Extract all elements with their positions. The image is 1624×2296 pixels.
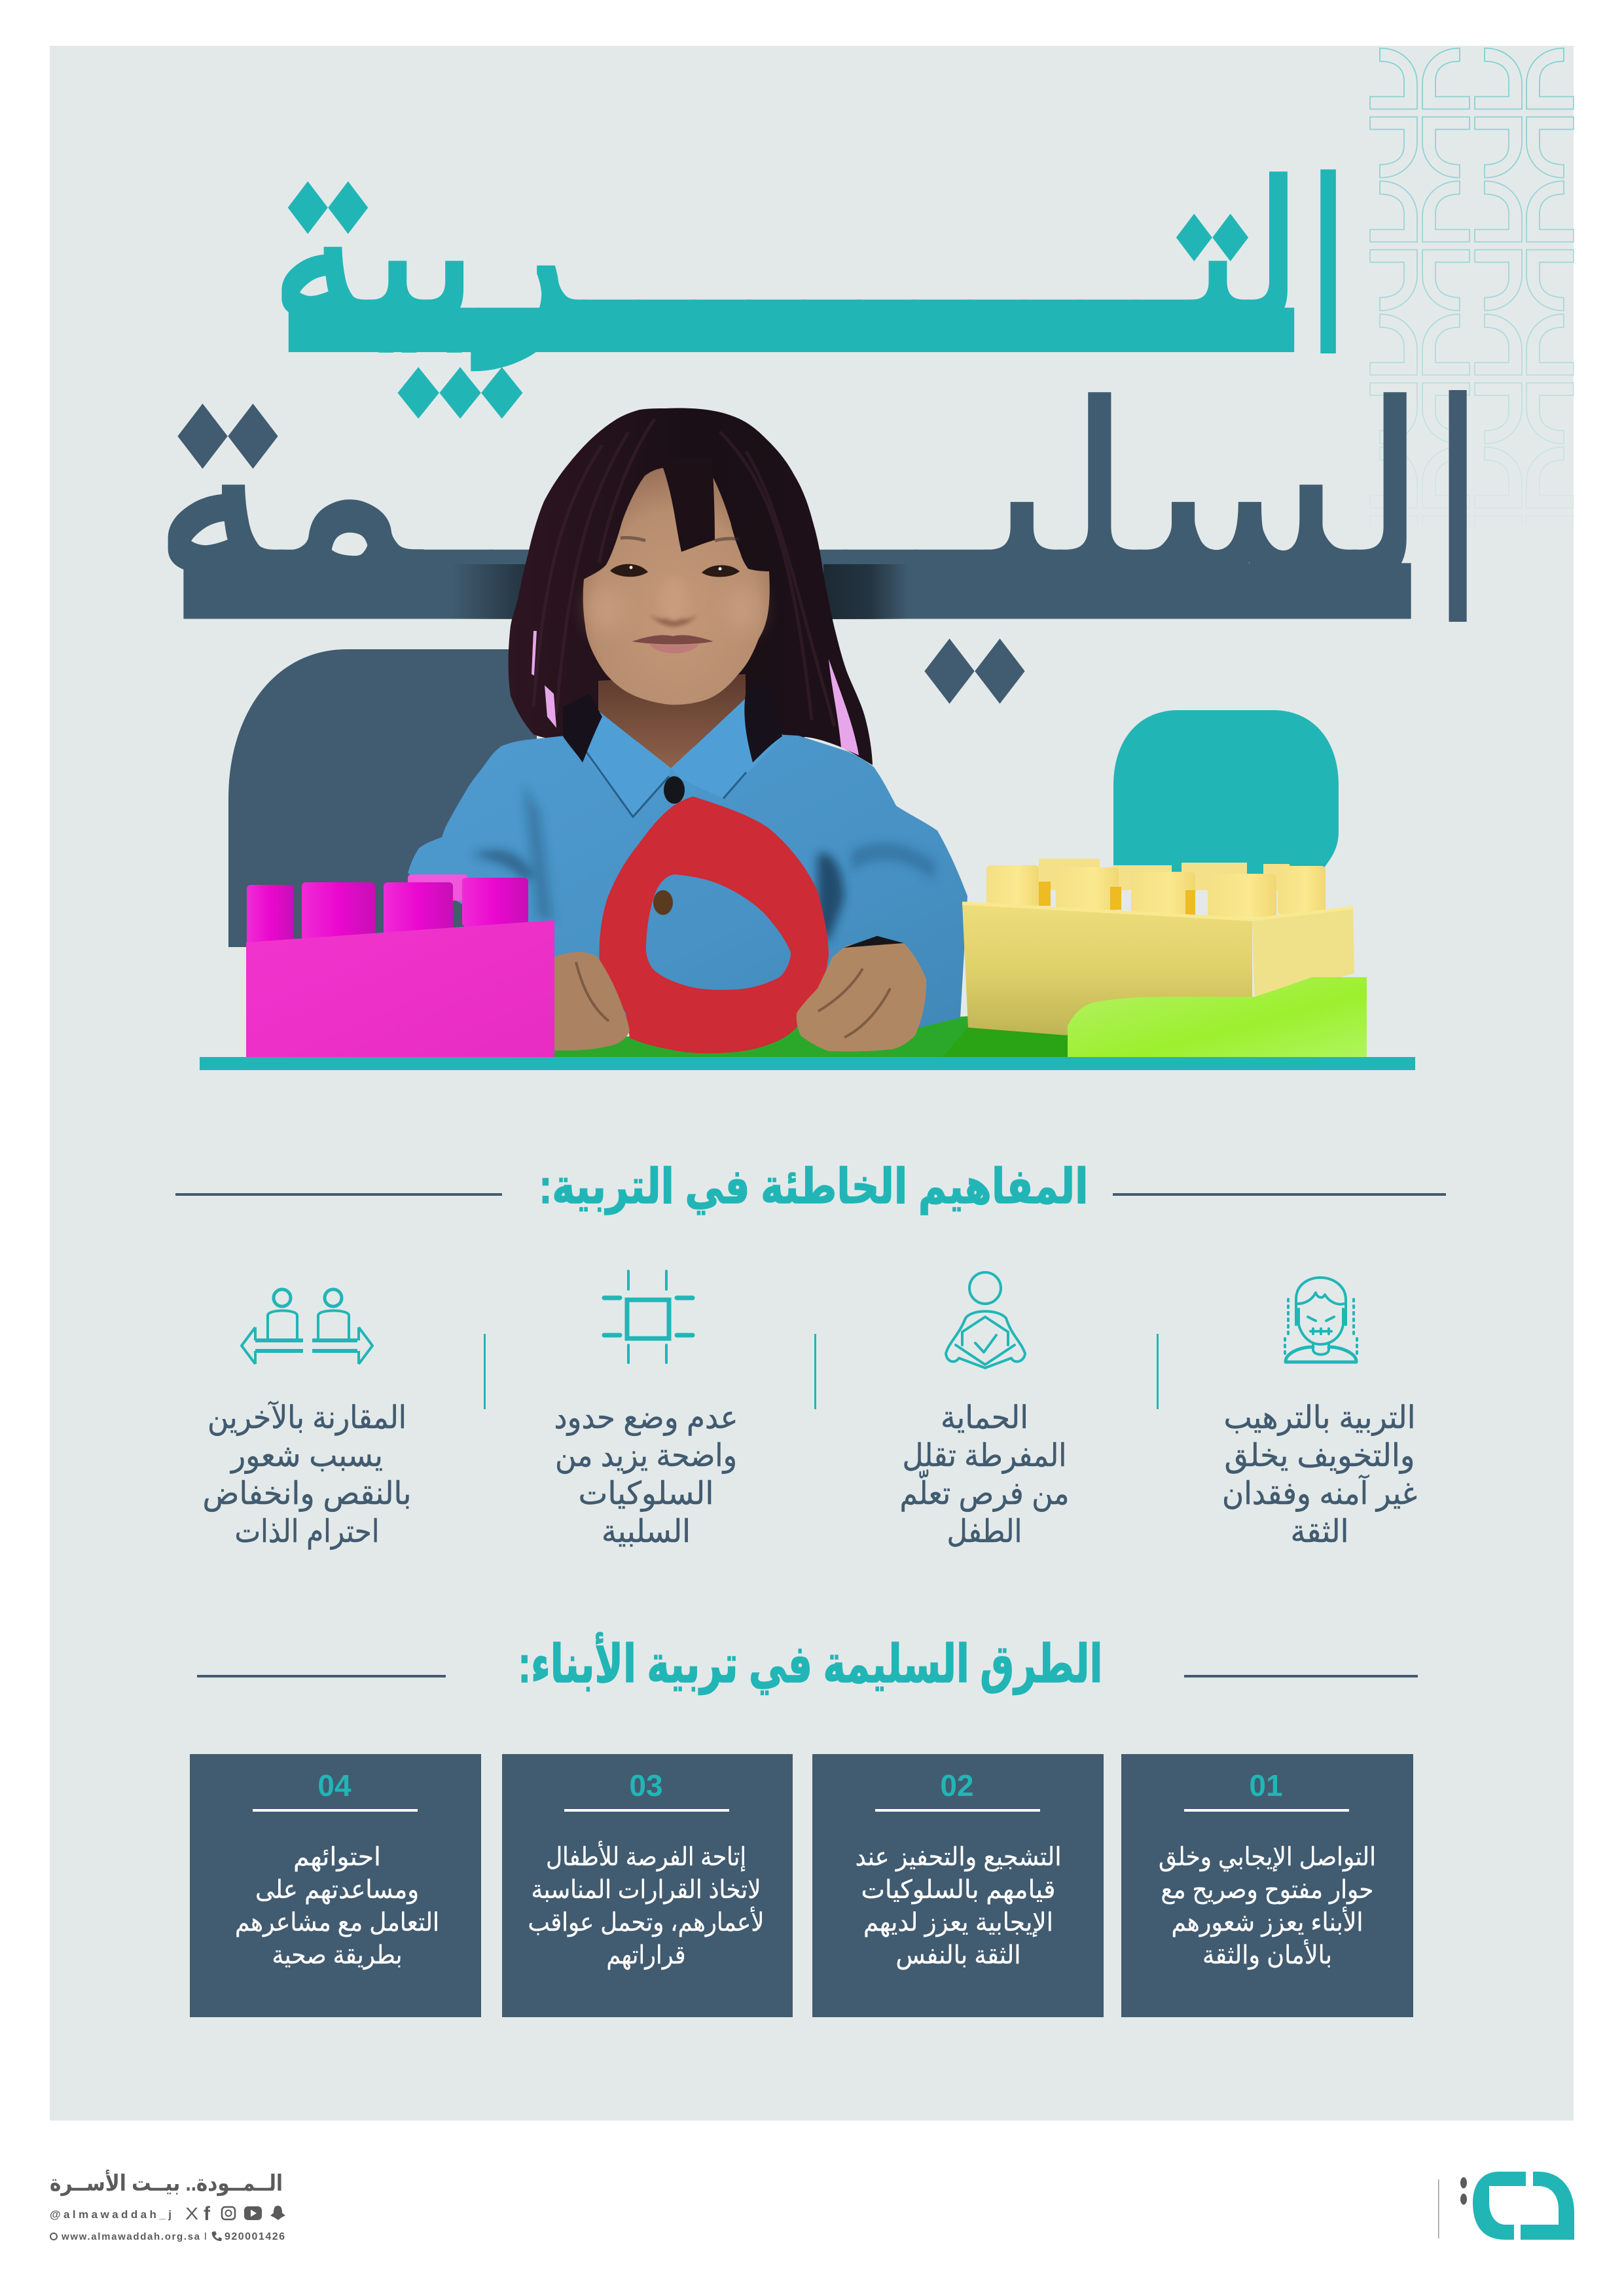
left hand [554,952,630,1050]
misconception text 3 [554,1401,738,1549]
card 01: بالأمان والثقة [1202,1939,1332,1970]
icon: no boundaries [604,1271,693,1363]
shirt button in the hole [653,890,673,915]
card 04: احتوائهم [293,1843,381,1872]
lime block [1068,977,1367,1057]
footer: website and phone [50,2231,285,2242]
footer: social handle: f [204,2203,211,2225]
card 01: التواصل الإيجابي وخلق [1159,1843,1376,1872]
card 03: لأعمارهم، وتحمل عواقب [528,1906,765,1937]
misconception text 2: المفرطة تقلل [902,1439,1067,1474]
misconception text 2: الطفل [947,1515,1022,1549]
dividers between misconceptions [484,1334,1159,1409]
misconception text 4: المقارنة بالآخرين [208,1400,406,1436]
card 03: إتاحة الفرصة للأطفال [546,1840,746,1872]
title line 2: ا [1430,346,1485,687]
yellow block top highlight [962,903,1353,920]
section heading: right methods [197,1632,1418,1695]
title line 2: ◆◆ [177,380,278,479]
misconception text 1: التربية بالترهيب [1224,1401,1415,1436]
shirt [408,733,967,1028]
icon: overprotection [946,1272,1025,1368]
card 03: 03 [629,1768,663,1803]
collar lines [585,749,746,817]
card 02: التشجيع والتحفيز عند [855,1843,1062,1872]
card 03: لاتخاذ القرارات المناسبة [532,1876,761,1905]
yellow block stud shadows [1039,882,1195,915]
right hand [797,942,926,1052]
title line 2: ـــــــــــــــ [183,377,1413,655]
card 02: قيامهم بالسلوكيات [861,1876,1055,1905]
hair streaks [533,419,835,726]
shirt folds and shadows [471,785,936,942]
misconception text 4 [203,1400,411,1550]
card 04: بطريقة صحية [272,1941,402,1970]
card 04: 04 [317,1768,352,1803]
navy arch shape [228,649,537,947]
card 02: 02 [940,1768,974,1803]
title line 1: ◆◆ [287,162,369,243]
footer: website and phone: www.almawaddah.org.sa [61,2231,200,2242]
yellow block rear studs [1039,859,1290,890]
misconception text 3: السلوكيات [579,1477,713,1512]
yellow block front face [962,903,1252,1035]
neck [598,674,746,768]
section heading: misconceptions: المفاهيم الخاطئة في التربية: [539,1159,1088,1215]
footer: organisation slogan: الــمــودة.. بيــت الأســرة [50,2169,283,2197]
title line 1: ــــــــــــــــ [288,155,1295,382]
collar button [664,776,685,804]
card 01 [1121,1754,1413,2017]
card 01: حوار مفتوح وصريح مع [1161,1876,1373,1905]
misconception text 3: السلبية [602,1515,691,1549]
misconception text 1 [1222,1401,1417,1549]
card 04: ومساعدتهم على [255,1876,419,1905]
finger lines [576,962,890,1037]
card 04: التعامل مع مشاعرهم [235,1909,439,1937]
pink block body [246,920,554,1057]
card 02: الإيجابية يعزز لديهم [863,1909,1053,1937]
icon: comparison [242,1289,372,1364]
misconception text 2: من فرص تعلّم [899,1469,1070,1512]
eyebrows [621,538,740,541]
title line 1: ◆◆◆ [397,348,523,427]
footer: social handle: X [185,2204,198,2223]
footer: social handle: @almawaddah_j [50,2208,171,2221]
title line 1: ◆◆ [1176,196,1249,268]
misconception text 1: والتخويف يخلق [1224,1439,1415,1474]
misconception text 1: غير آمنه وفقدان [1222,1474,1417,1512]
section heading: misconceptions [175,1159,1446,1215]
mouth [632,635,713,653]
hair back [509,408,873,765]
title line 2: ◆◆ [924,615,1025,714]
footer: logo [1438,2172,1574,2240]
black cuff [844,936,904,948]
collar [581,711,671,817]
icon: scared child [1285,1278,1357,1362]
teal arch shape [1113,710,1339,880]
eyes [610,564,740,577]
misconception text 1: الثقة [1291,1515,1348,1549]
card 02 [812,1754,1104,2017]
card 03: قراراتهم [606,1941,686,1970]
section heading: right methods: الطرق السليمة في تربية الأبناء: [518,1632,1102,1695]
card 02: الثقة بالنفس [895,1941,1021,1969]
face [583,468,770,705]
central bang [658,458,715,552]
misconception text 4: يسبب شعور [230,1439,383,1474]
title line 2 [152,346,1485,714]
title shadow beside the girl [452,564,909,619]
green table shadow [943,1028,1068,1057]
nose [649,578,698,627]
misconception text 4: بالنقص وانخفاض [203,1477,411,1512]
footer: website and phone: 920001426 [225,2231,285,2242]
misconception text 3: واضحة يزيد من [555,1439,737,1474]
decorative pattern: top right [1370,48,1574,577]
title line 1: ا [1304,135,1352,405]
misconception text 4: احترام الذات [234,1515,380,1550]
photo: girl with blocks [246,408,1367,1057]
pink hair reflections [532,631,859,755]
footer: social handle [50,2203,285,2225]
misconception text 2: الحماية [941,1401,1028,1435]
misconception text 2 [899,1401,1070,1549]
yellow block side face [1252,908,1354,1001]
pink block studs [247,885,294,947]
yellow block studs [986,865,1039,907]
title line 1: لتـــــــــــربية [269,148,1305,368]
card 01: الأبناء يعزز شعورهم [1172,1906,1363,1937]
teal base bar [200,1057,1415,1070]
misconception text 3: عدم وضع حدود [554,1401,738,1436]
table surface [554,1015,1074,1057]
card 03 [502,1754,793,2017]
cheek highlights [588,586,760,632]
card 01: 01 [1249,1768,1283,1803]
card 04 [190,1754,481,2017]
hair strands over shoulders [563,681,782,762]
red number five shape [599,797,829,1053]
title line 2: لسليــــــــمة [152,364,1428,626]
